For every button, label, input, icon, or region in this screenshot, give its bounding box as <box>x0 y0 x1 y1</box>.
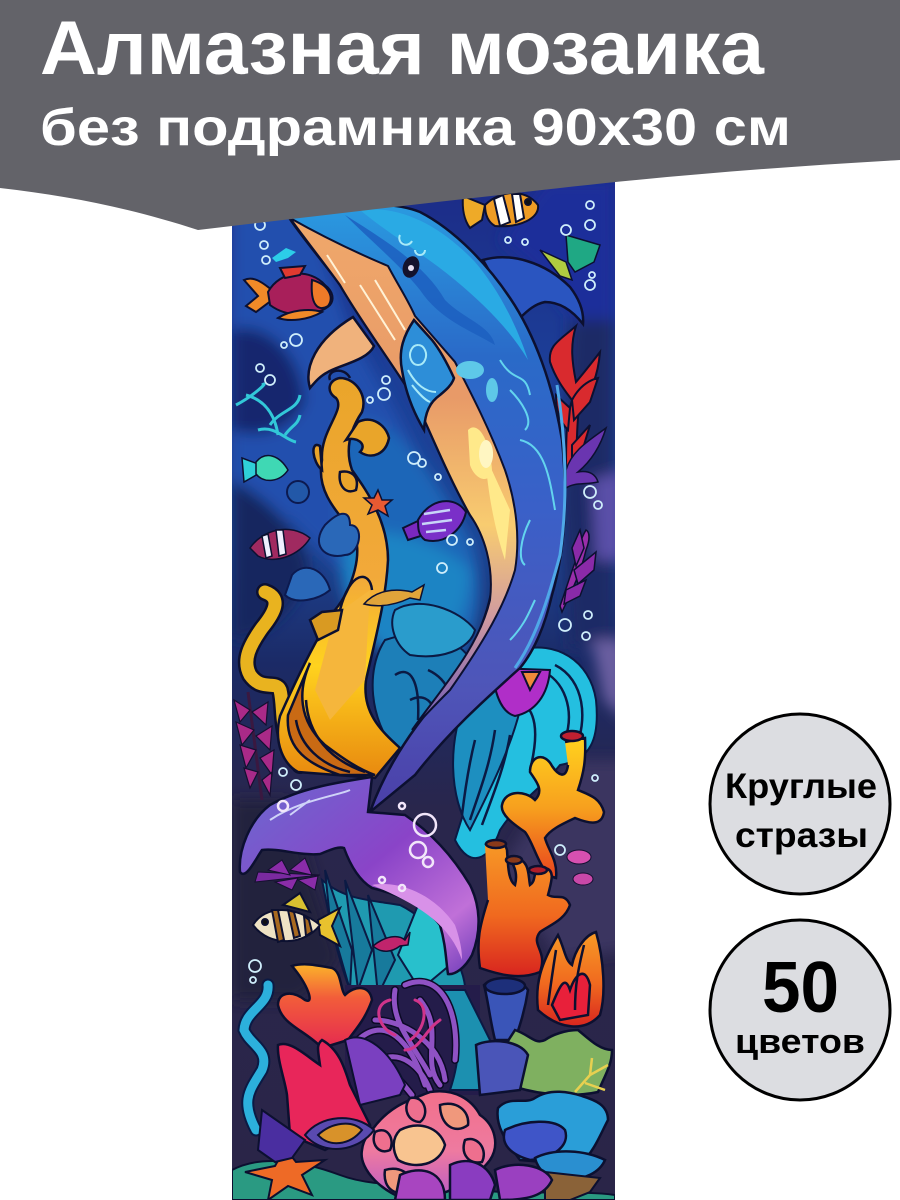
sponge: blue tube <box>484 978 528 1040</box>
badge: 50 colours: цветов <box>735 1023 865 1061</box>
coral: blue <box>497 1092 608 1180</box>
ground <box>232 1161 615 1200</box>
fish: orange and violet <box>305 1118 374 1149</box>
coral: purple tentacles <box>345 982 490 1095</box>
eye <box>402 256 420 278</box>
badge: 50 colours <box>710 920 890 1100</box>
coral: cyan seaweed left <box>244 985 268 1130</box>
small gold fish <box>364 585 424 606</box>
left yellow kelp <box>247 592 300 765</box>
coral: flame <box>537 932 603 1026</box>
algae cluster left <box>236 384 300 442</box>
coral: yellow twig <box>575 1058 608 1092</box>
fish: purple <box>403 501 466 541</box>
sponge: blue cup <box>476 1041 528 1095</box>
belly <box>290 218 517 730</box>
dolphin <box>240 205 583 974</box>
badge: 50 colours: 50 <box>762 948 839 1028</box>
fish: small cyan <box>272 248 296 262</box>
swirl clouds <box>285 481 359 600</box>
fish: teal and lime <box>540 235 600 280</box>
heading: main title: Алмазная мозаика <box>40 6 765 91</box>
water blotches <box>232 180 625 1000</box>
badge: round rhinestones <box>710 714 890 894</box>
purple seaweed <box>560 428 606 612</box>
painting: dolphin underwater mosaic <box>232 170 625 1200</box>
badge: round rhinestones: стразы <box>735 816 868 855</box>
body <box>288 205 565 812</box>
fish: striped <box>250 529 310 559</box>
belly highlights <box>468 427 510 560</box>
sponge: purple tubes <box>395 1161 552 1200</box>
small starfish <box>364 490 392 516</box>
header banner <box>0 0 900 230</box>
rock: brown sponge <box>545 1172 600 1200</box>
cyan wave plants <box>373 604 597 858</box>
purple fish among waves <box>492 668 550 716</box>
yellow kelp ribbon <box>278 371 400 778</box>
purple crystal <box>258 1110 305 1162</box>
fish: green <box>242 456 288 482</box>
coral: pink brain <box>362 1091 495 1200</box>
front pectoral fin <box>401 320 454 430</box>
rear pectoral fin <box>308 317 374 388</box>
fish: clownfish <box>463 193 538 228</box>
coral: orange branching <box>478 840 570 976</box>
coral: green <box>495 1030 612 1095</box>
starfish <box>245 1148 325 1200</box>
purple seaweed left <box>234 692 274 800</box>
coral: purple fan <box>345 1037 405 1105</box>
small pink fish pair <box>567 850 593 885</box>
coral: orange-red left <box>278 964 372 1150</box>
teal plants below tail <box>320 870 466 985</box>
tail rings <box>278 801 436 891</box>
tail fluke <box>240 777 479 974</box>
red seaweed <box>550 326 600 474</box>
heading: subtitle: без подрамника 90х30 см <box>40 99 791 157</box>
fish: gold striped <box>253 893 340 946</box>
back sheen <box>360 209 528 360</box>
title <box>40 6 791 157</box>
purple weed under fluke <box>255 858 320 890</box>
dorsal fin <box>483 257 583 324</box>
fish: red <box>244 266 333 320</box>
coral: yellow-orange top right <box>502 731 604 878</box>
badge: round rhinestones: Круглые <box>725 767 877 806</box>
bubbles <box>249 201 602 983</box>
small magenta fish <box>373 932 410 951</box>
